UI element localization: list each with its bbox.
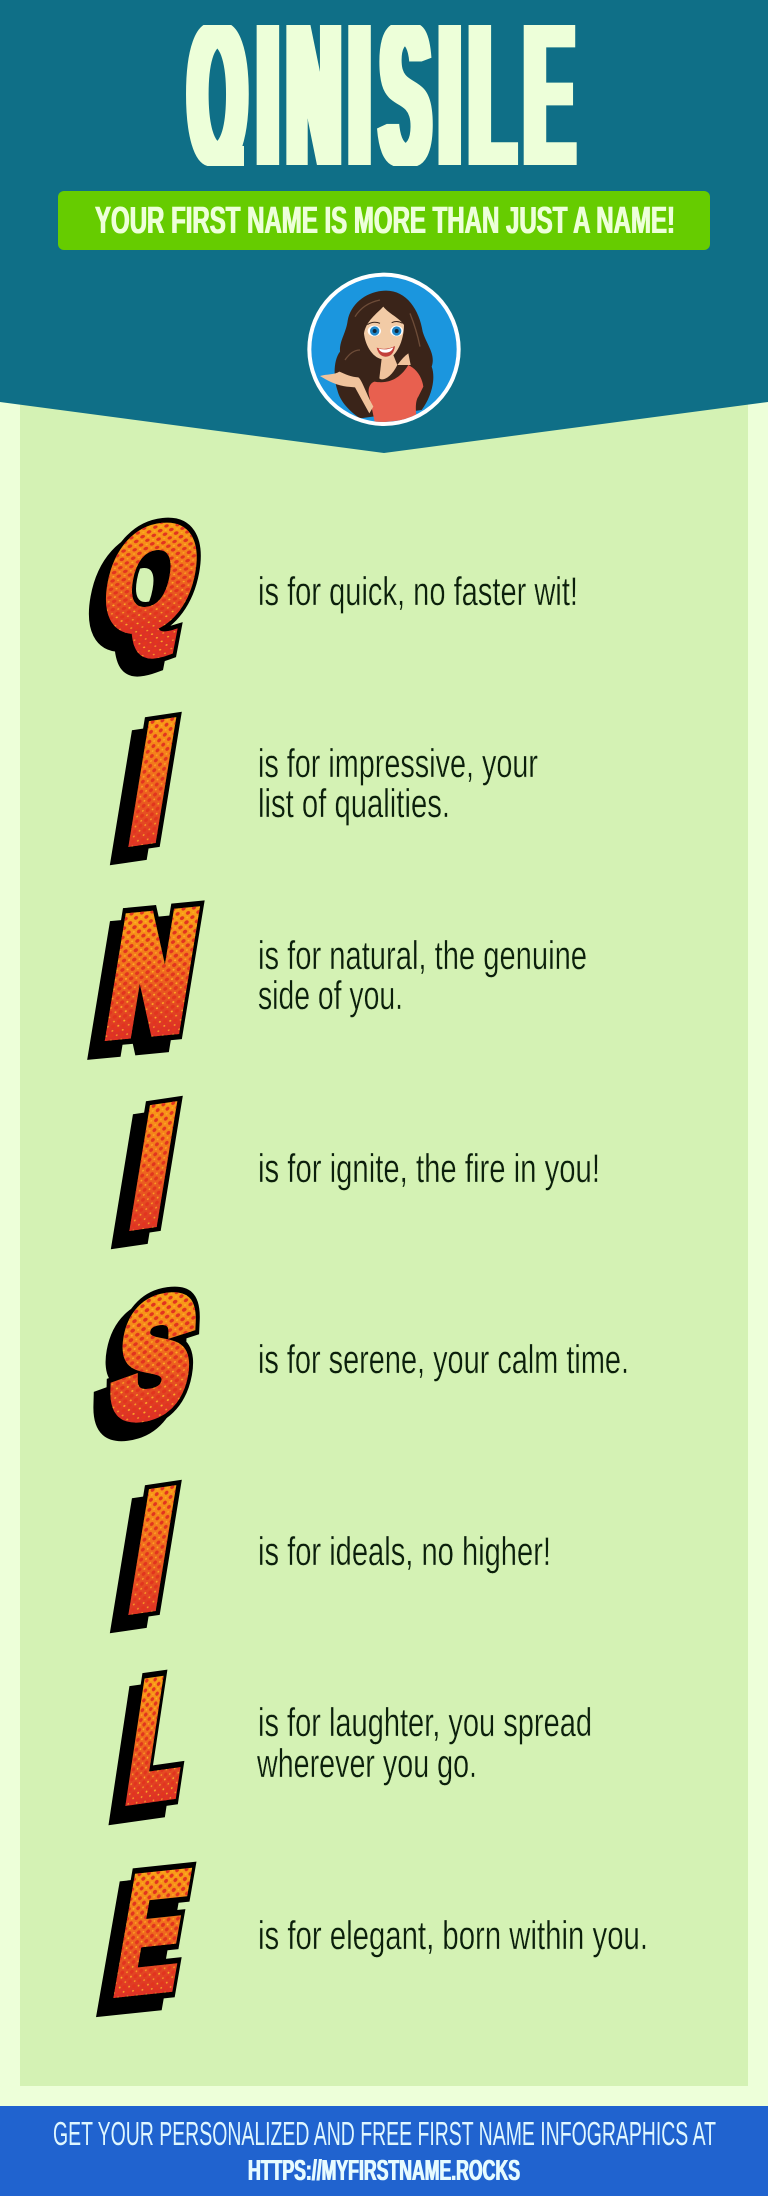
row: Q (80, 496, 578, 675)
row: E (91, 1838, 648, 2043)
letter I: I (109, 676, 195, 889)
text: L lines (256, 1701, 592, 1786)
text: L lines: is for laughter, you spread (258, 1701, 592, 1745)
letter I: I (96, 689, 182, 902)
letter E: E (91, 1851, 187, 2043)
letter Q: Q (93, 496, 210, 662)
letter L: L (119, 1643, 198, 1836)
row: I (97, 1060, 600, 1286)
text: N lines: side of you. (258, 974, 403, 1018)
letter E: E (104, 1838, 200, 2030)
subtitle bar (58, 191, 710, 250)
letter I: I (110, 1060, 196, 1273)
row: S (88, 1263, 629, 1465)
letter Q: Q (93, 496, 210, 662)
letter I: I (109, 1444, 195, 1657)
text: N lines (258, 934, 587, 1018)
letter S: S (101, 1263, 207, 1452)
letter E: E (104, 1838, 200, 2030)
text: I lines: list of qualities. (258, 782, 450, 826)
letter S: S (101, 1263, 207, 1452)
letter I: I (109, 676, 195, 889)
text: Q line: is for quick, no faster wit! (258, 570, 578, 614)
row: L (106, 1643, 592, 1849)
text: S line: is for serene, your calm time. (258, 1338, 629, 1382)
row: N (87, 881, 587, 1078)
letter Q: Q (93, 496, 210, 662)
text: I lines (258, 742, 538, 826)
row: I (96, 1444, 551, 1670)
letter N: N (100, 881, 205, 1065)
letter I: I (109, 1444, 195, 1657)
letter L: L (119, 1643, 198, 1836)
text: L lines: wherever you go. (256, 1742, 477, 1786)
row: I (96, 676, 538, 902)
text: I line: is for ideals, no higher! (258, 1530, 551, 1574)
letter S: S (88, 1276, 194, 1465)
letter I: I (109, 1444, 195, 1657)
letter S: S (101, 1263, 207, 1452)
letter N: N (100, 881, 205, 1065)
letter I: I (96, 1457, 182, 1670)
text: I line: is for ignite, the fire in you! (258, 1147, 600, 1191)
text: I lines: is for impressive, your (258, 742, 538, 786)
main content panel (20, 380, 748, 2086)
header banner (0, 0, 768, 453)
text: N lines: is for natural, the genuine (258, 934, 587, 978)
footer url: HTTPS://MYFIRSTNAME.ROCKS (248, 2155, 520, 2187)
letter E: E (104, 1838, 200, 2030)
letter I: I (110, 1060, 196, 1273)
letter L: L (119, 1643, 198, 1836)
letter I: I (110, 1060, 196, 1273)
letter Q: Q (80, 509, 197, 675)
letter I: I (97, 1073, 183, 1286)
letter L: L (106, 1656, 185, 1849)
letter N: N (100, 881, 205, 1065)
letter I: I (109, 676, 195, 889)
icon: avatar woman in circle (307, 273, 461, 426)
letter N: N (87, 894, 192, 1078)
footer bar (0, 2106, 768, 2196)
title (186, 25, 577, 166)
